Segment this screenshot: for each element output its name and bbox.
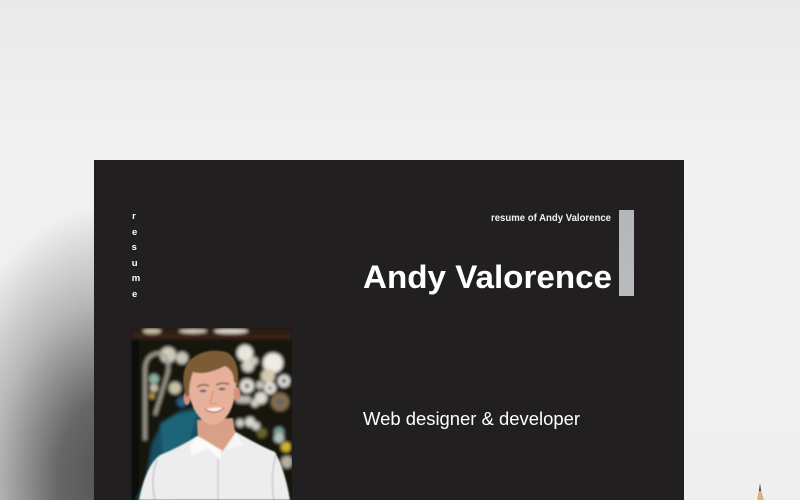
pencil tip xyxy=(757,483,764,500)
subtitle: resume of Andy Valorence: resume of Andy Valorence xyxy=(491,212,611,224)
vertical label: resume: m xyxy=(132,273,140,284)
shirt xyxy=(139,432,290,500)
hair xyxy=(183,351,238,397)
job title: Web designer & developer xyxy=(363,409,580,429)
vertical label: resume: u xyxy=(132,258,138,269)
photo subject xyxy=(139,351,290,500)
vertical label: resume: r xyxy=(132,211,136,222)
nose xyxy=(210,391,217,404)
vertical label: resume: e xyxy=(132,227,137,238)
sheet shadow xyxy=(0,160,96,500)
vertical label: resume: s xyxy=(132,242,137,253)
smile xyxy=(206,408,223,411)
vertical label: resume xyxy=(132,211,140,300)
accent bar xyxy=(619,210,634,296)
resume mockup scene xyxy=(0,160,764,500)
vertical label: resume: e xyxy=(132,289,137,300)
name heading: Andy Valorence xyxy=(363,259,612,295)
face xyxy=(188,365,238,425)
neck xyxy=(196,417,236,453)
photo backdrop shelves and spools xyxy=(131,328,293,500)
resume sheet xyxy=(94,160,684,500)
eyes xyxy=(200,390,206,392)
portrait photo xyxy=(131,328,293,500)
